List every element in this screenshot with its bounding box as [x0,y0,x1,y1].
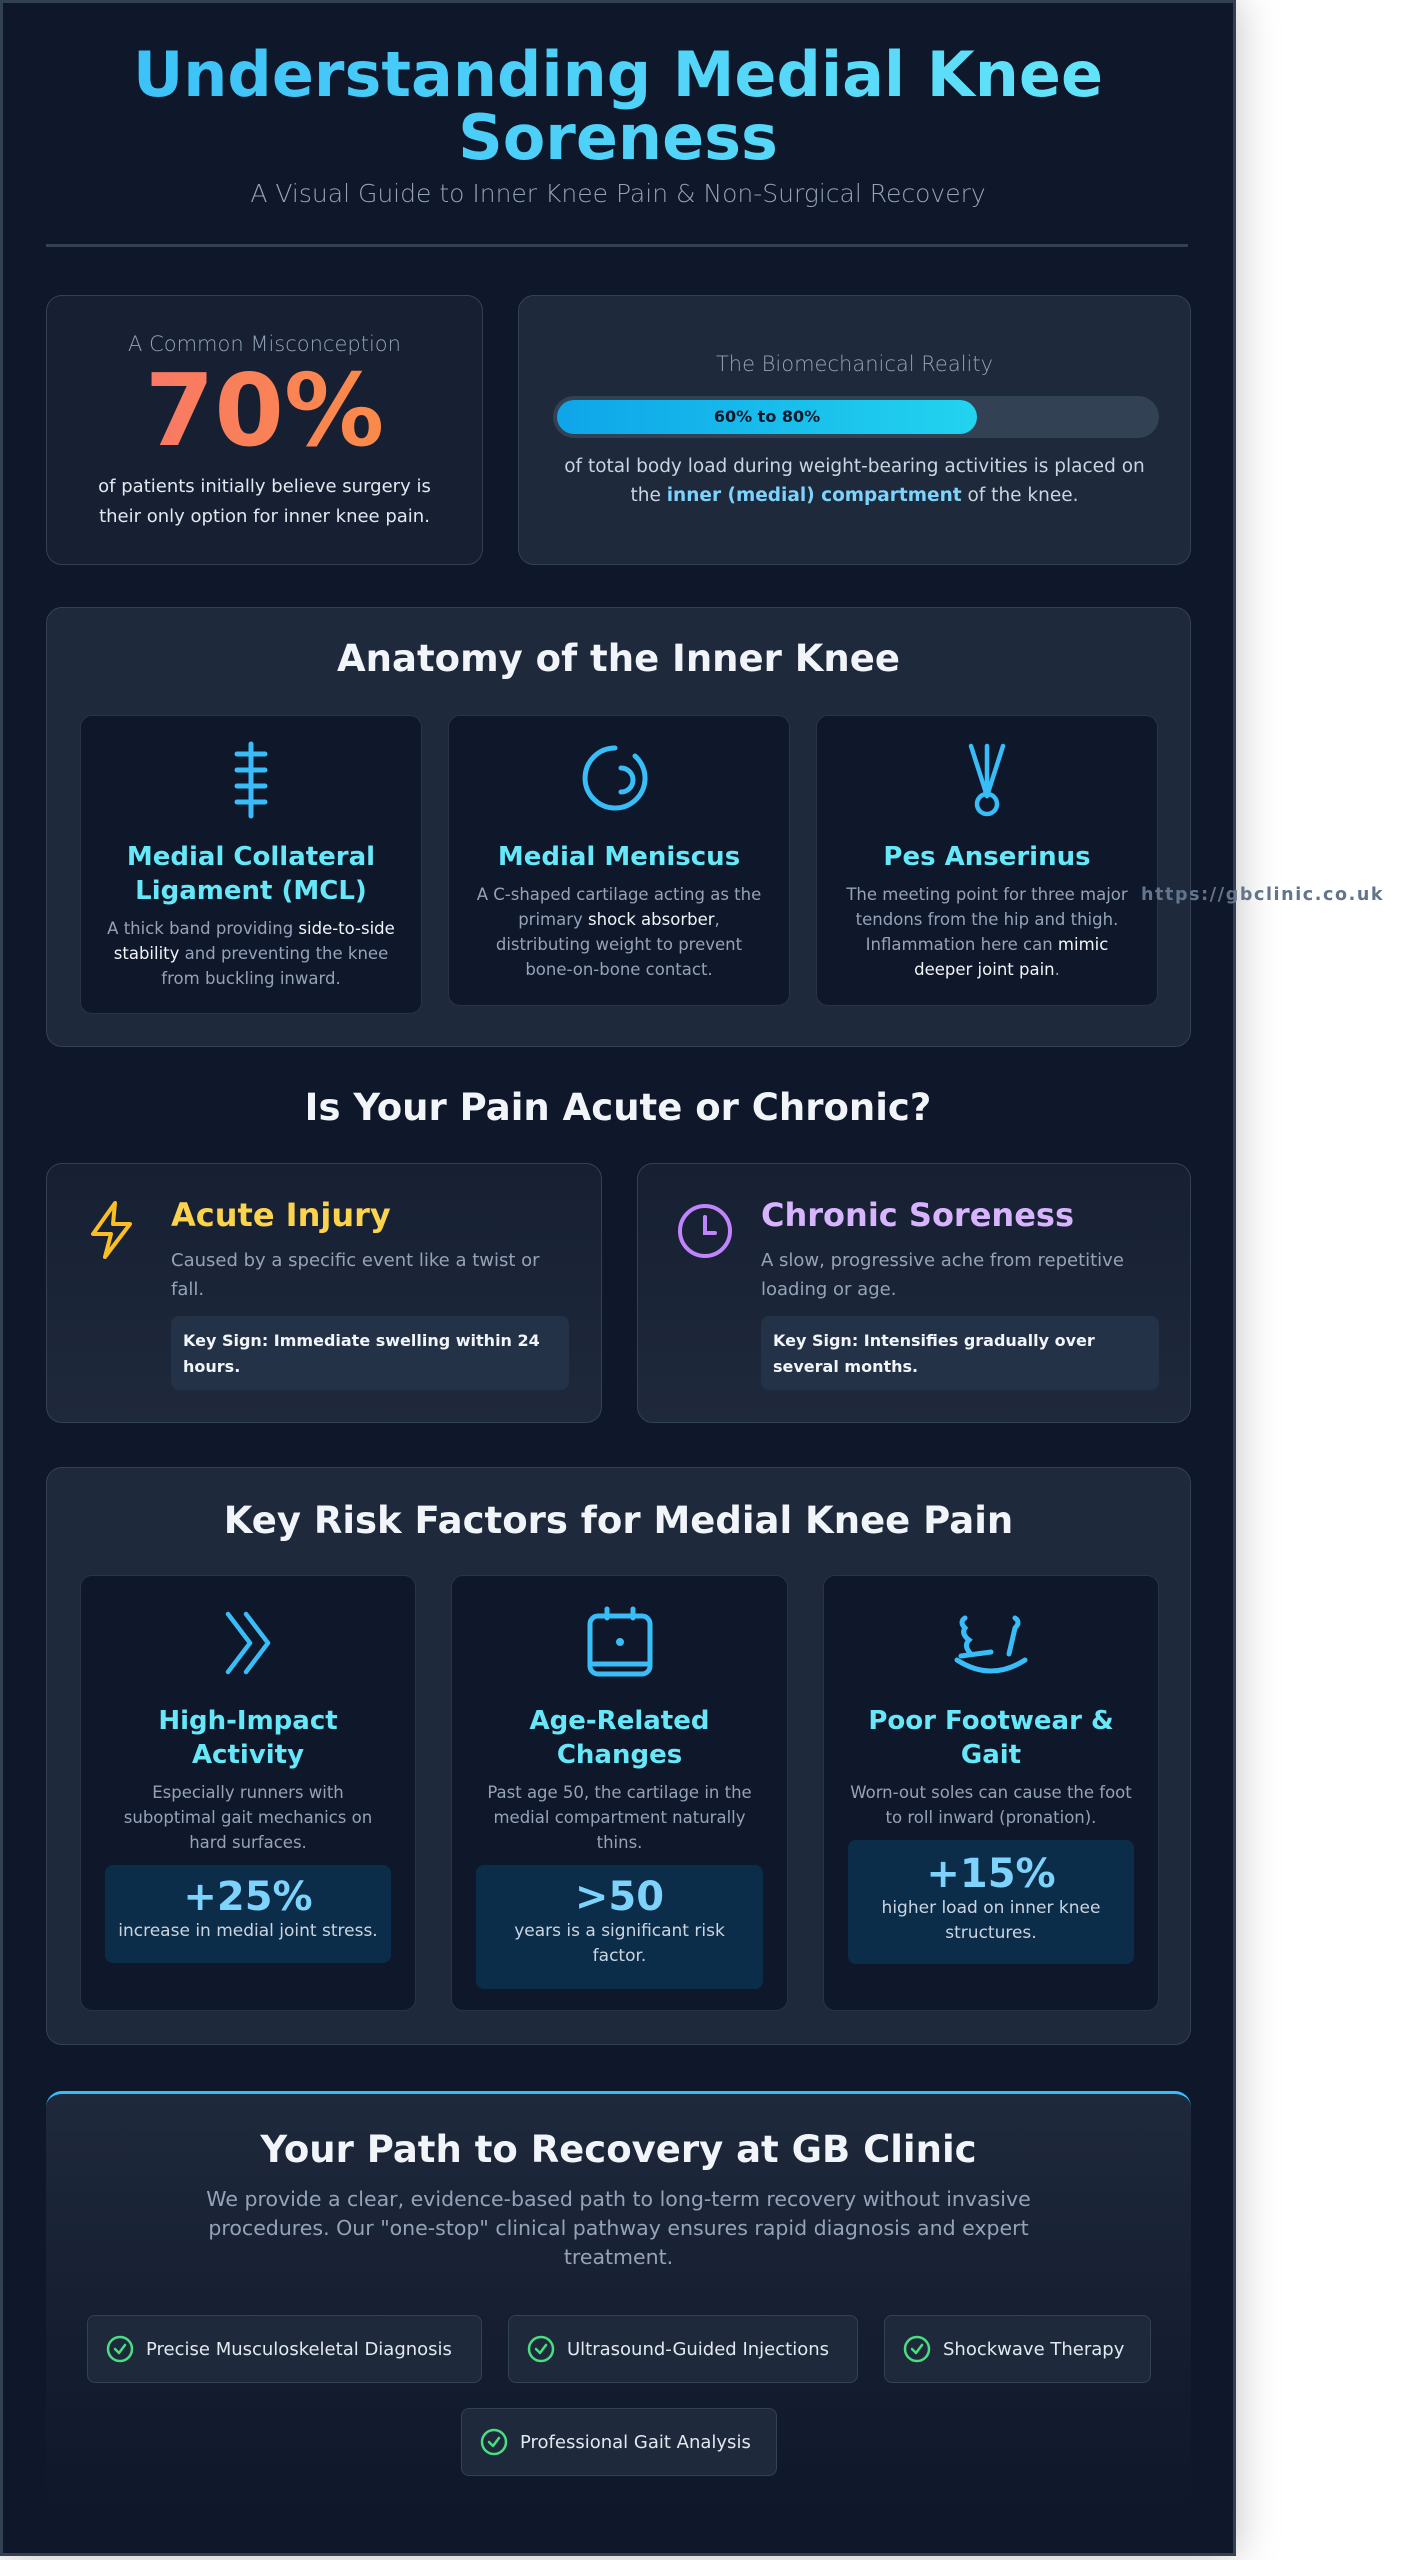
heading: Key Risk Factors for Medial Knee Pain [224,1499,1013,1542]
pill: injections: Ultrasound-Guided Injections [567,2338,829,2360]
title: Pes Anserinus [883,842,1091,872]
text: bone-on-bone contact. [525,960,713,979]
title: Acute Injury [171,1196,391,1234]
text [850,1783,1132,1827]
icon: meniscus [582,746,648,810]
title [127,842,375,906]
stat: +15%: higher load on inner knee [882,1898,1100,1918]
stat: +15% [848,1840,1134,1964]
pill: gait: Professional Gait Analysis [520,2432,751,2452]
panel: anatomy [46,607,1191,1047]
panel: risk factors [46,1467,1191,2045]
icon: tendons [968,744,1006,816]
description [98,476,431,527]
icon: chevrons [226,1612,270,1674]
title: Medial Meniscus [498,842,740,872]
panel: misconception stat [46,295,483,565]
text: Inflammation here can mimic [866,935,1108,954]
title [158,1706,338,1770]
title: Age-Related [530,1706,709,1736]
heading: Anatomy of the Inner Knee [337,637,900,680]
pill: shockwave [884,2315,1151,2383]
stat: >50: years is a significant risk [514,1921,725,1941]
title: Changes [557,1740,682,1770]
title [530,1706,709,1770]
card: pes anserinus [816,715,1158,1006]
description: of total body load during weight-bearing activities is placed on [564,456,1145,477]
text: A slow, progressive ache from repetitive loading or age. [761,1250,1124,1300]
text: distributing weight to prevent [496,935,742,954]
label: The Biomechanical Reality [716,352,993,376]
big number 70%: 70% [145,352,384,469]
text: Past age 50, the cartilage in the [487,1783,752,1802]
progress bar [553,396,1159,438]
panel: recovery [46,2091,1191,2511]
heading: Your Path to Recovery at GB Clinic [260,2128,977,2171]
text: medial compartment naturally [493,1808,746,1827]
panel: acute injury [46,1163,602,1423]
text: hard surfaces. [189,1833,307,1852]
paragraph: We provide a clear, evidence-based path to long-term recovery without invasive procedures. Our "one-stop" clinical pathway ensures rapid diagnosis and expert treatment. [206,2187,1031,2269]
text: thins. [597,1833,642,1852]
text: tendons from the hip and thigh. [856,910,1118,929]
pill: injections [508,2315,858,2383]
stat: >50: >50 [575,1874,664,1920]
title [868,1706,1114,1770]
panel: chronic soreness [637,1163,1191,1423]
text: primary shock absorber, [518,910,720,929]
heading: acute or chronic: Is Your Pain Acute or Chronic? [305,1086,931,1129]
pill: gait [461,2408,777,2476]
description: of patients initially believe surgery is [98,476,431,497]
text: Caused by a specific event like a twist or fall. [171,1250,540,1300]
text: stability and preventing the knee [114,944,388,963]
key sign [171,1316,569,1390]
stat: >50 [476,1865,763,1989]
text: deeper joint pain. [914,960,1060,979]
stat: +15%: +15% [926,1851,1056,1897]
subtitle: A Visual Guide to Inner Knee Pain & Non-Surgical Recovery [250,179,986,208]
text [846,885,1128,979]
stat: +25%: +25% [183,1874,313,1920]
card: age [451,1575,788,2011]
text: A C-shaped cartilage acting as the [477,885,761,904]
description: their only option for inner knee pain. [99,506,430,527]
icon: feet [954,1616,1028,1674]
card: MCL [80,715,422,1014]
text: A thick band providing side-to-side [107,919,395,938]
stat: +25% [105,1865,391,1963]
panel: biomechanical reality [518,295,1191,565]
key sign [761,1316,1159,1390]
title: Soreness [458,101,778,174]
stat: +25%: increase in medial joint stress. [118,1921,378,1941]
text: from buckling inward. [161,969,341,988]
text: to roll inward (pronation). [886,1808,1096,1827]
title: Medial Collateral [127,842,375,872]
text [107,919,395,988]
big number 70% [47,356,482,466]
key sign: Key Sign: Immediate swelling within 24 hours. [183,1331,540,1376]
watermark: https://gbclinic.co.uk [1141,885,1384,905]
icon: clock [678,1204,732,1258]
key sign: Key Sign: Intensifies gradually over several months. [773,1331,1095,1376]
stat: >50: factor. [593,1946,646,1966]
progress bar: 60% to 80% [714,407,820,426]
title: Chronic Soreness [761,1196,1074,1234]
title: Gait [961,1740,1021,1770]
title: Ligament (MCL) [135,876,367,906]
icon: ligament [234,742,268,818]
text [476,885,761,979]
text [124,1783,372,1852]
title: High-Impact [158,1706,338,1736]
title: Poor Footwear & [868,1706,1114,1736]
card: high impact [80,1575,416,2011]
title [3,43,1233,169]
description: the inner (medial) compartment of the knee. [630,485,1079,506]
stat: +15%: structures. [945,1923,1037,1943]
title: Activity [192,1740,304,1770]
text: Worn-out soles can cause the foot [850,1783,1132,1802]
card: meniscus [448,715,790,1006]
label: A Common Misconception [128,332,401,356]
text [487,1783,752,1852]
text: suboptimal gait mechanics on [124,1808,372,1827]
pill: shockwave: Shockwave Therapy [943,2338,1124,2360]
text: The meeting point for three major [846,885,1128,904]
description [564,456,1145,506]
icon: lightning [90,1201,132,1259]
text: Especially runners with [152,1783,344,1802]
icon: calendar [588,1606,652,1676]
pill: diagnosis [87,2315,482,2383]
card: footwear [823,1575,1159,2011]
pill: diagnosis: Precise Musculoskeletal Diagnosis [146,2338,452,2360]
title: Understanding Medial Knee [133,38,1103,111]
